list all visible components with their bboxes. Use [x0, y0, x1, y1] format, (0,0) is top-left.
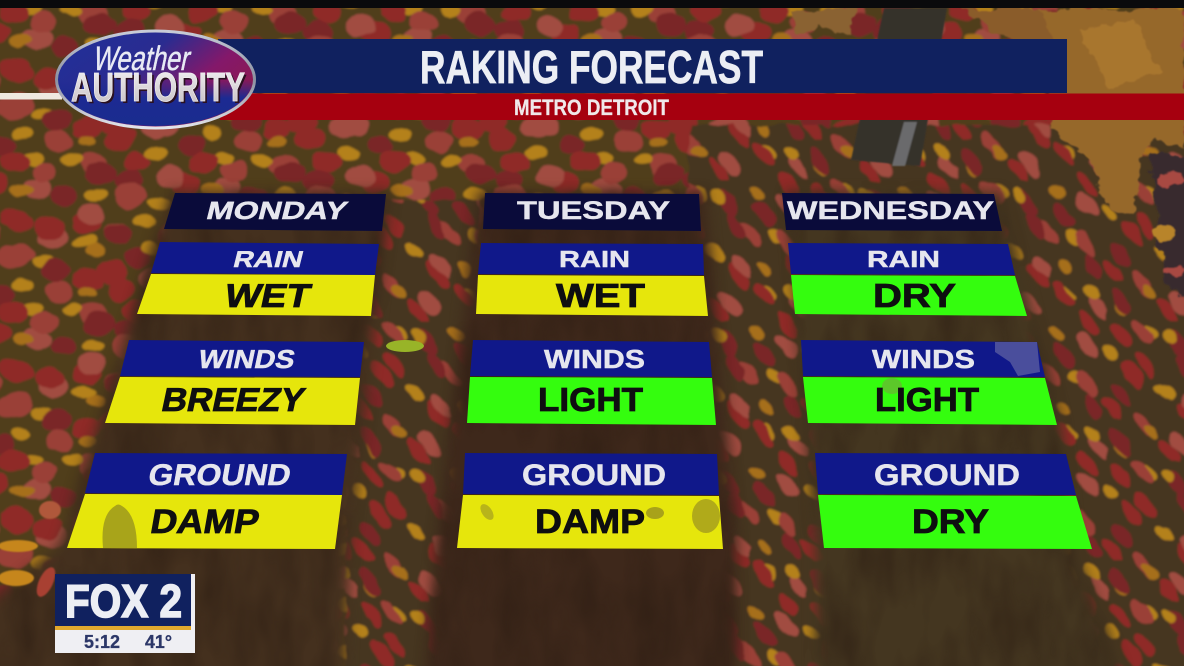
- Tuesday rain: wet: WET: [556, 277, 645, 314]
- header banner: [218, 39, 1184, 120]
- Monday winds: breezy: BREEZY: [158, 382, 308, 419]
- Tuesday winds: light: WINDS: [544, 344, 645, 374]
- logo: Weather Authority: AUTHORITY: [73, 66, 247, 112]
- FOX 2 station bug with clock and temperature: 5:12: [84, 632, 120, 652]
- Wednesday rain: dry: RAIN: [867, 246, 940, 272]
- Wednesday heading: [782, 193, 1002, 231]
- FOX 2 station bug with clock and temperature: [55, 574, 195, 653]
- tan foliage, top right: [790, 8, 1184, 305]
- top black bar: [0, 0, 1184, 8]
- white rule left of logo: [0, 93, 62, 100]
- subtitle text: METRO DETROIT: [514, 95, 669, 120]
- Wednesday ground: dry: DRY: [912, 503, 989, 541]
- Wednesday winds: light: WINDS: [872, 344, 975, 374]
- FOX 2 station bug with clock and temperature: 41°: [145, 632, 172, 652]
- subtitle bar: [220, 94, 1184, 120]
- Wednesday rain: dry: DRY: [873, 277, 956, 314]
- Monday rain: wet: [137, 242, 379, 316]
- Tuesday heading: [483, 193, 701, 231]
- Monday ground: damp: DAMP: [148, 503, 262, 541]
- Tuesday ground: damp: [457, 453, 723, 549]
- Monday ground: damp: [67, 453, 347, 549]
- Tuesday winds: light: [467, 340, 716, 425]
- Tuesday winds: light: LIGHT: [538, 381, 643, 418]
- Tuesday rain: wet: [476, 243, 708, 316]
- Monday rain: wet: RAIN: [231, 246, 306, 272]
- Tuesday ground: damp: GROUND: [522, 459, 666, 492]
- Tuesday rain: wet: RAIN: [559, 246, 630, 272]
- Monday winds: breezy: [105, 340, 364, 425]
- logo: Weather Authority: Weather: [90, 40, 194, 78]
- Monday rain: wet: WET: [221, 278, 315, 315]
- panel: Wednesday: [782, 193, 1092, 549]
- Wednesday winds: light: LIGHT: [875, 381, 979, 418]
- logo: Weather Authority: AUTHORITY: [71, 64, 245, 110]
- loose green leaf: [386, 340, 424, 352]
- panel: Monday: [67, 193, 386, 549]
- title text: RAKING FORECAST: [420, 41, 763, 93]
- Monday heading: MONDAY: [204, 197, 350, 225]
- Wednesday ground: dry: [815, 453, 1092, 549]
- Tuesday heading: TUESDAY: [517, 197, 670, 225]
- Wednesday heading: WEDNESDAY: [787, 197, 994, 225]
- Wednesday ground: dry: GROUND: [874, 459, 1020, 492]
- Wednesday rain: dry: [788, 243, 1027, 316]
- logo: Weather Authority: [56, 31, 254, 128]
- title bar: [218, 39, 1067, 93]
- Monday winds: breezy: WINDS: [196, 344, 298, 374]
- Monday heading: [164, 193, 386, 231]
- scattered leaves, lower left: [0, 501, 61, 599]
- panel: Tuesday: [457, 193, 723, 549]
- Monday ground: damp: GROUND: [146, 459, 294, 492]
- Tuesday ground: damp: DAMP: [535, 503, 645, 541]
- FOX 2 station bug with clock and temperature: FOX 2: [65, 575, 182, 627]
- tree trunk: [851, 8, 947, 166]
- Wednesday winds: light: [801, 340, 1057, 425]
